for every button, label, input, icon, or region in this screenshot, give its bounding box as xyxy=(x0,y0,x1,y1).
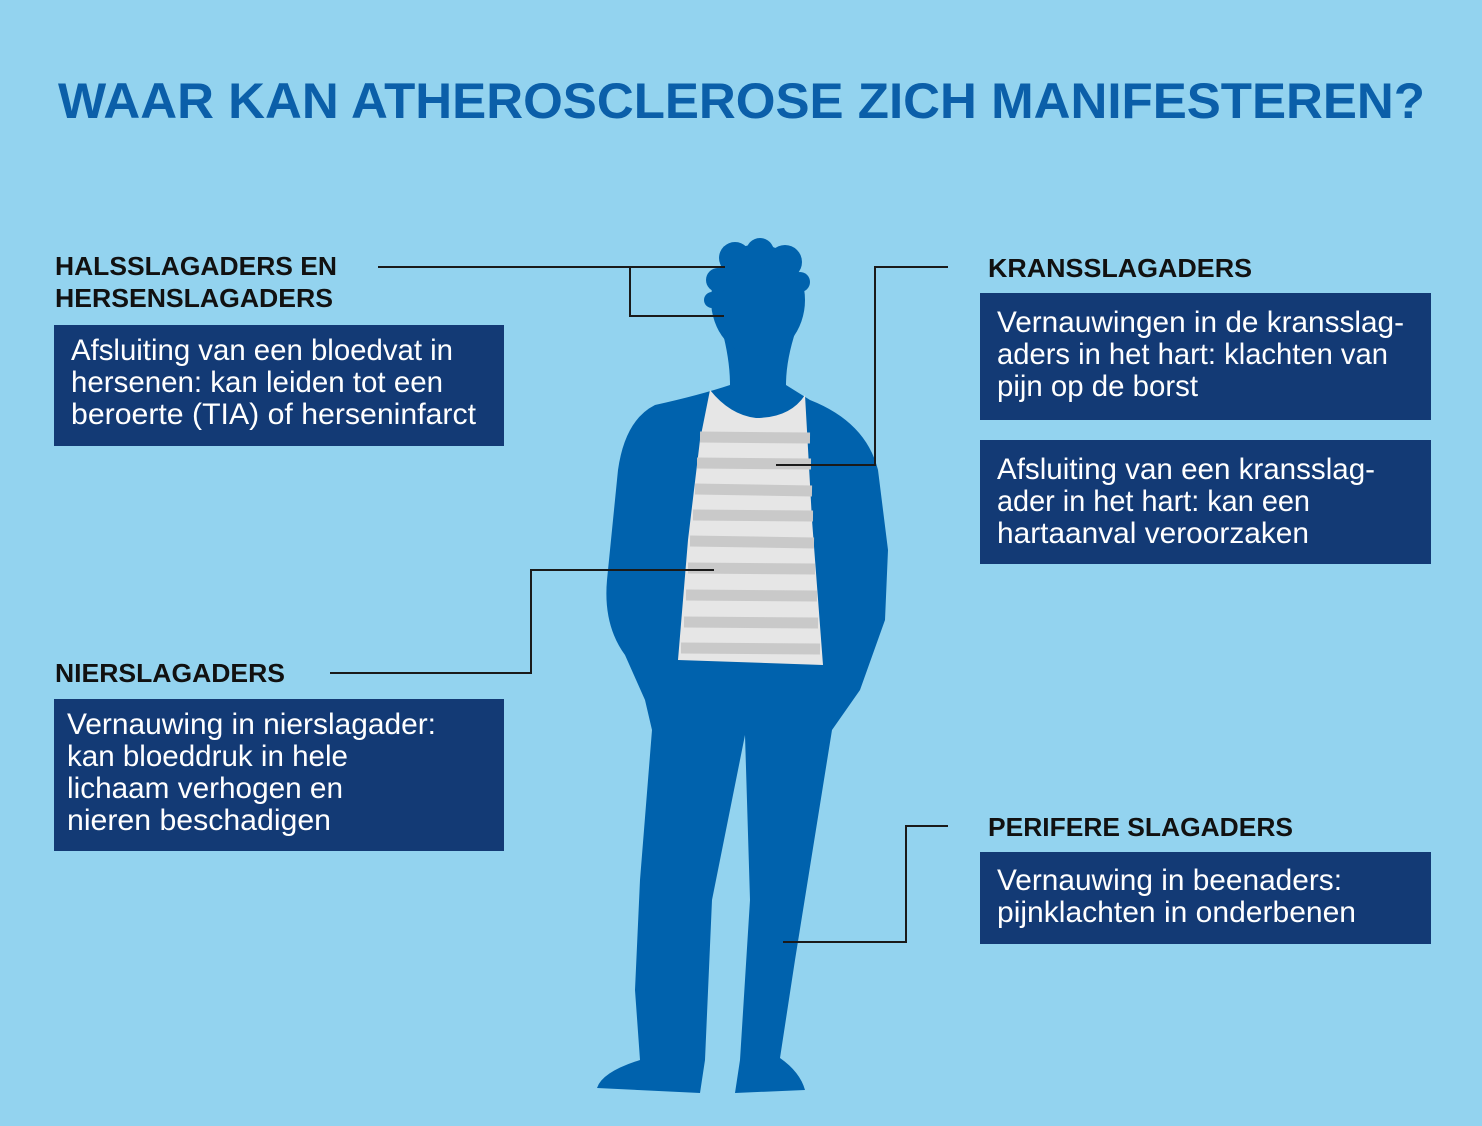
connector: kransslagaders xyxy=(776,267,948,465)
box: perifere slagaders: pijnklachten in onderbenen xyxy=(997,896,1356,929)
heading: nierslagaders: NIERSLAGADERS xyxy=(55,658,285,688)
box: kransslagaders 2: ader in het hart: kan een xyxy=(997,485,1310,518)
heading: halsslagaders xyxy=(55,251,337,313)
box: kransslagaders 2: Afsluiting van een kransslag- xyxy=(997,453,1375,486)
heading: kransslagaders: KRANSSLAGADERS xyxy=(988,253,1252,283)
box: nierslagaders: lichaam verhogen en xyxy=(67,772,343,805)
box: kransslagaders 2 xyxy=(980,440,1431,564)
box: halsslagaders: hersenen: kan leiden tot een xyxy=(71,366,443,399)
box: perifere slagaders xyxy=(980,852,1431,944)
connector: halsslagaders xyxy=(378,267,725,316)
heading: perifere slagaders: PERIFERE SLAGADERS xyxy=(988,812,1293,842)
connector: nierslagaders xyxy=(330,570,714,673)
box: nierslagaders: Vernauwing in nierslagader: xyxy=(67,708,436,741)
box: perifere slagaders: Vernauwing in beenaders: xyxy=(997,864,1342,897)
box: nierslagaders: nieren beschadigen xyxy=(67,804,331,837)
figure: human silhouette xyxy=(597,238,888,1093)
box: nierslagaders xyxy=(54,699,504,851)
box: kransslagaders 1: Vernauwingen in de kransslag- xyxy=(997,306,1404,339)
box: halsslagaders: beroerte (TIA) of herseninfarct xyxy=(71,398,477,431)
heading: halsslagaders: HERSENSLAGADERS xyxy=(55,283,333,313)
shirt xyxy=(678,390,823,665)
box: kransslagaders 1: pijn op de borst xyxy=(997,370,1199,403)
box: kransslagaders 2: hartaanval veroorzaken xyxy=(997,517,1309,550)
box: halsslagaders xyxy=(54,325,504,446)
title: WAAR KAN ATHEROSCLEROSE ZICH MANIFESTEREN? xyxy=(58,73,1425,129)
box: halsslagaders: Afsluiting van een bloedvat in xyxy=(71,334,453,367)
box: nierslagaders: kan bloeddruk in hele xyxy=(67,740,348,773)
box: kransslagaders 1 xyxy=(980,293,1431,420)
box: kransslagaders 1: aders in het hart: klachten van xyxy=(997,338,1388,371)
heading: halsslagaders: HALSSLAGADERS EN xyxy=(55,251,337,281)
connector: perifere slagaders xyxy=(783,826,948,942)
